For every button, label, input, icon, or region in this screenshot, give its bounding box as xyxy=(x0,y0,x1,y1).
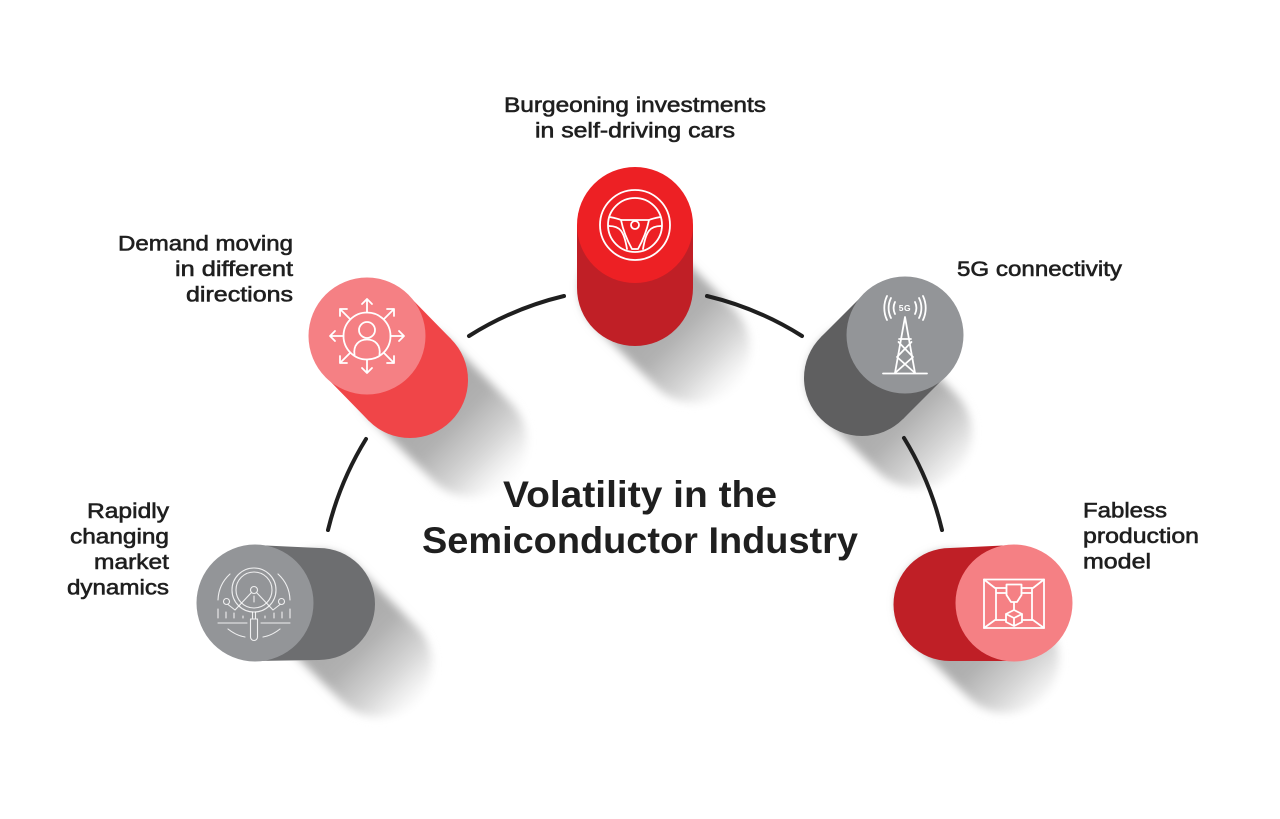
label: demand moving: Demand moving xyxy=(118,232,293,256)
cylinder: demand xyxy=(308,278,468,438)
label: market dynamics: changing xyxy=(70,524,169,548)
icon text: 5G: 5G xyxy=(899,303,911,313)
icon: steering wheel xyxy=(600,190,670,260)
label: fabless production xyxy=(1083,498,1199,574)
long shadow: self-driving cars xyxy=(635,288,695,348)
label: 5G connectivity: 5G connectivity xyxy=(957,257,1122,281)
cylinder: fabless production xyxy=(894,544,1072,662)
title: Volatility in the xyxy=(503,474,777,515)
icon: 3D printer xyxy=(984,580,1044,628)
long shadow: fabless xyxy=(950,604,1006,660)
label: market dynamics: Rapidly xyxy=(87,499,169,523)
icon: magnifier over charts xyxy=(218,568,290,640)
icon: 5G tower xyxy=(883,296,927,374)
cylinder: 5G connectivity xyxy=(804,276,964,436)
label: demand moving: directions xyxy=(186,282,293,306)
label: market dynamics xyxy=(67,499,169,600)
connecting arc: demand to cars xyxy=(469,296,564,336)
label: demand moving xyxy=(118,232,293,306)
connecting arc: dynamics to demand xyxy=(328,439,366,530)
connecting arc: 5G to fabless xyxy=(904,438,942,530)
label: market dynamics: market xyxy=(94,550,169,574)
icon: person with arrows xyxy=(330,299,404,373)
label: demand moving: in different xyxy=(175,257,293,281)
cylinder: self-driving cars xyxy=(577,167,693,346)
cylinder: market dynamics xyxy=(196,544,375,662)
long shadow: 5G xyxy=(862,378,917,433)
label: self-driving cars xyxy=(504,93,766,142)
label: fabless production: production xyxy=(1083,524,1199,548)
title xyxy=(422,474,858,561)
label: self-driving cars: in self-driving cars xyxy=(535,118,735,142)
label: market dynamics: dynamics xyxy=(67,576,169,600)
title: Semiconductor Industry xyxy=(422,520,858,561)
label: fabless production: model xyxy=(1083,550,1151,574)
label: self-driving cars: Burgeoning investments xyxy=(504,93,766,117)
connecting arc: cars to 5G xyxy=(707,296,802,336)
long shadow: demand xyxy=(410,380,472,442)
long shadow: market dynamics xyxy=(319,604,379,664)
label: fabless production: Fabless xyxy=(1083,498,1167,522)
